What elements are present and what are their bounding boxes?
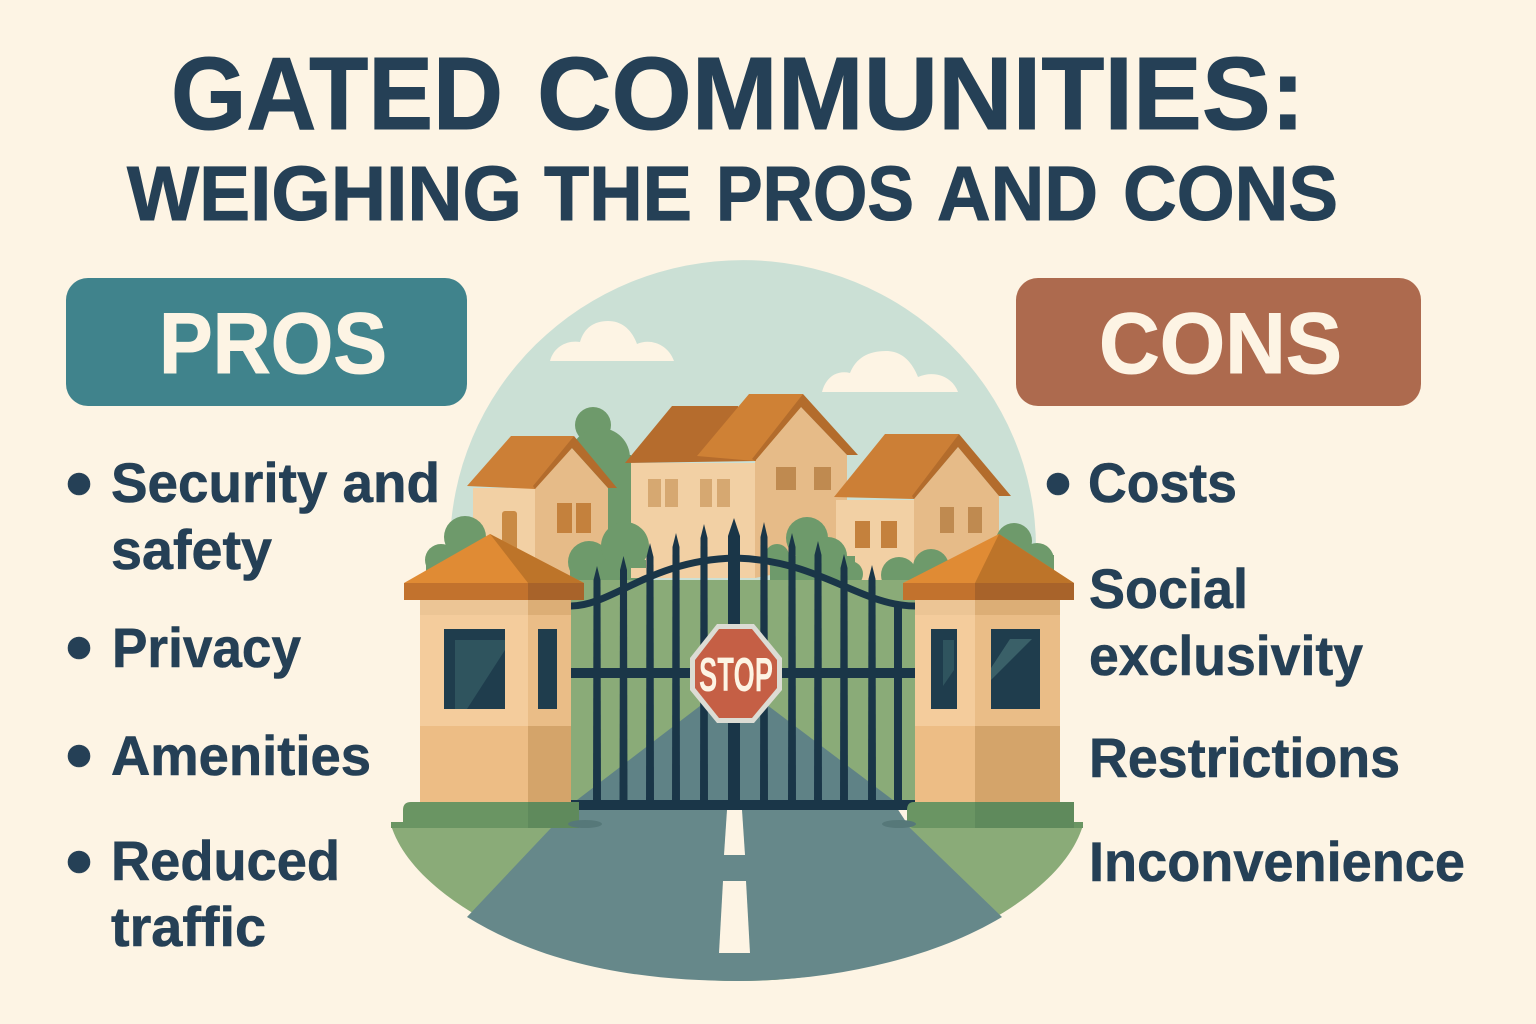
pro item: amenities: Amenities [111,724,371,787]
panel: pros header [66,278,467,406]
iron gate [571,518,915,810]
pro item: security and safety [68,451,440,581]
panel: pros header: PROS [159,296,387,392]
pro item: reduced traffic: traffic [111,895,266,958]
lawn behind gate [571,580,915,805]
title: CONS [1123,151,1338,237]
panel: cons header [1016,278,1421,406]
house right [834,434,1011,580]
tree behind houses [570,407,631,570]
list: pros [68,451,440,958]
title [127,36,1338,237]
title: COMMUNITIES: [537,36,1305,151]
gatehouse right [882,534,1083,828]
con item: inconvenience: Inconvenience [1089,830,1465,893]
stop sign [690,624,782,723]
list: cons [1047,451,1465,893]
title: GATED [171,36,503,151]
con item: costs: Costs [1088,451,1237,514]
pro item: security and safety: safety [111,518,272,581]
con item: social exclusivity: exclusivity [1089,624,1363,687]
title: WEIGHING [127,151,522,237]
con item: social exclusivity [1089,557,1363,687]
road markings [719,810,750,953]
title: THE [544,151,692,237]
panel: cons header: CONS [1099,296,1342,392]
pro item: reduced traffic: Reduced [111,829,340,892]
stop sign: STOP [699,649,773,702]
ground and road [391,680,1083,981]
cloud right [822,351,958,392]
house middle [625,394,858,578]
con item: social exclusivity: Social [1089,557,1248,620]
pro item: security and safety: Security and [111,451,440,514]
pro item: privacy: Privacy [112,616,301,679]
house left [467,436,617,580]
sky circle [450,260,1036,620]
title: AND [937,151,1098,237]
con item: restrictions: Restrictions [1089,726,1400,789]
illustration: gated community scene [391,260,1083,981]
cloud left [550,321,674,361]
bushes [425,516,1054,600]
title: PROS [716,151,914,237]
gatehouse left [391,534,602,828]
pro item: reduced traffic [68,829,340,958]
